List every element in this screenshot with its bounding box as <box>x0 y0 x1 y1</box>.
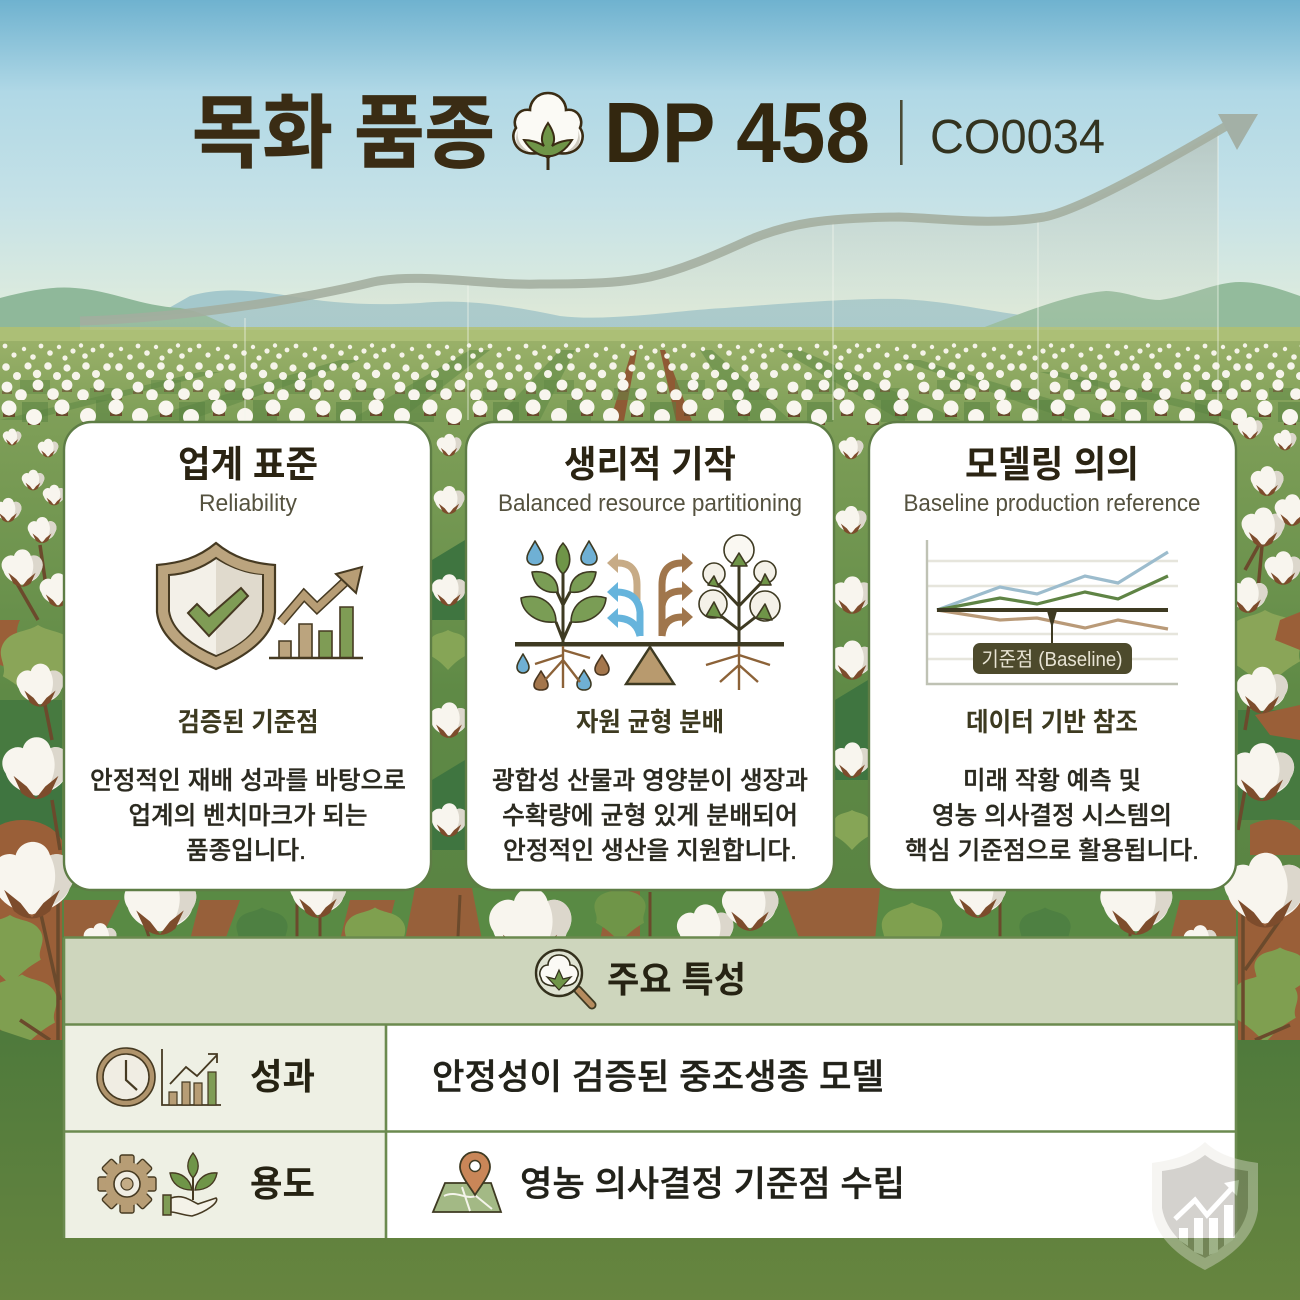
baseline label: 기준점 (Baseline) <box>982 648 1122 671</box>
panel: physiological mechanism <box>466 422 834 890</box>
trend arrow <box>80 114 1258 420</box>
body text: 수확량에 균형 있게 분배되어 <box>502 802 798 830</box>
background: sky <box>0 0 1300 330</box>
strip below cards <box>64 888 1236 972</box>
line chart <box>927 540 1178 684</box>
subheading: Balanced resource partitioning <box>498 490 802 517</box>
subheading: Reliability <box>199 490 297 517</box>
trend gridlines <box>245 135 1218 420</box>
row: use <box>98 1152 905 1216</box>
body text: 광합성 산물과 영양분이 생장과 <box>492 767 808 795</box>
background: cotton field <box>0 327 1300 1057</box>
body text <box>905 767 1199 865</box>
field rows: darker leaf stripes <box>0 350 1270 420</box>
central furrows <box>610 350 692 421</box>
table header <box>536 950 746 1005</box>
panel: modeling significance <box>869 422 1236 890</box>
icon: magnifier with cotton <box>536 950 592 1005</box>
series: blue <box>937 552 1168 610</box>
icon: growth bars <box>162 1049 221 1105</box>
trend arrowhead <box>1218 114 1258 150</box>
body text: 핵심 기준점으로 활용됩니다. <box>905 837 1199 865</box>
icon: sprout in hand <box>163 1153 217 1216</box>
label: 성과 <box>250 1056 315 1097</box>
icon: cotton boll <box>513 93 583 170</box>
table: key traits <box>64 938 1236 1238</box>
heading: 생리적 기작 <box>564 444 736 485</box>
water drops <box>517 541 609 690</box>
baseline label <box>973 643 1132 674</box>
watermark shield <box>1152 1142 1258 1270</box>
body text: 품종입니다. <box>186 837 306 865</box>
title: id: CO0034 <box>930 111 1105 164</box>
left margin foliage <box>0 545 75 1050</box>
value: 안정성이 검증된 중조생종 모델 <box>432 1058 884 1097</box>
body text: 영농 의사결정 시스템의 <box>932 802 1172 830</box>
body text <box>90 767 406 865</box>
cotton plant <box>699 535 780 644</box>
body text: 안정적인 생산을 지원합니다. <box>503 837 797 865</box>
fulcrum <box>626 647 674 684</box>
title: variety: 목화 품종 <box>192 89 495 178</box>
label: 용도 <box>250 1163 315 1204</box>
roots <box>535 646 770 690</box>
heading: 모델링 의의 <box>965 444 1139 485</box>
row: performance <box>97 1048 884 1106</box>
right margin foliage <box>1228 510 1300 1045</box>
icon: map pin <box>433 1152 501 1212</box>
title divider <box>900 100 903 165</box>
value: 영농 의사결정 기준점 수립 <box>520 1165 905 1204</box>
panel: industry standard <box>64 422 431 890</box>
caption: 자원 균형 분배 <box>576 707 724 737</box>
icon: resource balance <box>515 535 784 690</box>
caption: 검증된 기준점 <box>178 707 318 737</box>
header text: 주요 특성 <box>607 959 746 1000</box>
arrowheads <box>607 553 693 628</box>
distant bolls <box>0 342 1300 426</box>
gap foliage between cards <box>429 540 871 850</box>
background: bottom green <box>0 1040 1300 1300</box>
title <box>192 86 1105 181</box>
trend line <box>80 125 1228 321</box>
body text <box>492 767 808 865</box>
icon: shield and growth chart <box>157 543 363 669</box>
background: distant hills <box>0 282 1300 330</box>
series: green <box>937 576 1168 610</box>
body text: 미래 작황 예측 및 <box>963 767 1141 795</box>
subheading: Baseline production reference <box>904 490 1200 517</box>
large cotton bolls <box>0 417 1300 963</box>
series: tan <box>937 610 1168 629</box>
icon: clock <box>97 1048 155 1106</box>
baseline pin <box>1047 611 1057 643</box>
beam <box>515 642 784 646</box>
baseline <box>937 608 1168 612</box>
icon: gear <box>98 1155 156 1213</box>
body text: 안정적인 재배 성과를 바탕으로 <box>90 767 406 795</box>
caption: 데이터 기반 참조 <box>966 707 1138 737</box>
trend area <box>80 130 1218 330</box>
left plant <box>521 543 606 644</box>
heading: 업계 표준 <box>178 444 318 485</box>
title: code: DP 458 <box>604 86 870 181</box>
body text: 업계의 벤치마크가 되는 <box>128 802 368 830</box>
arrows <box>612 563 682 636</box>
